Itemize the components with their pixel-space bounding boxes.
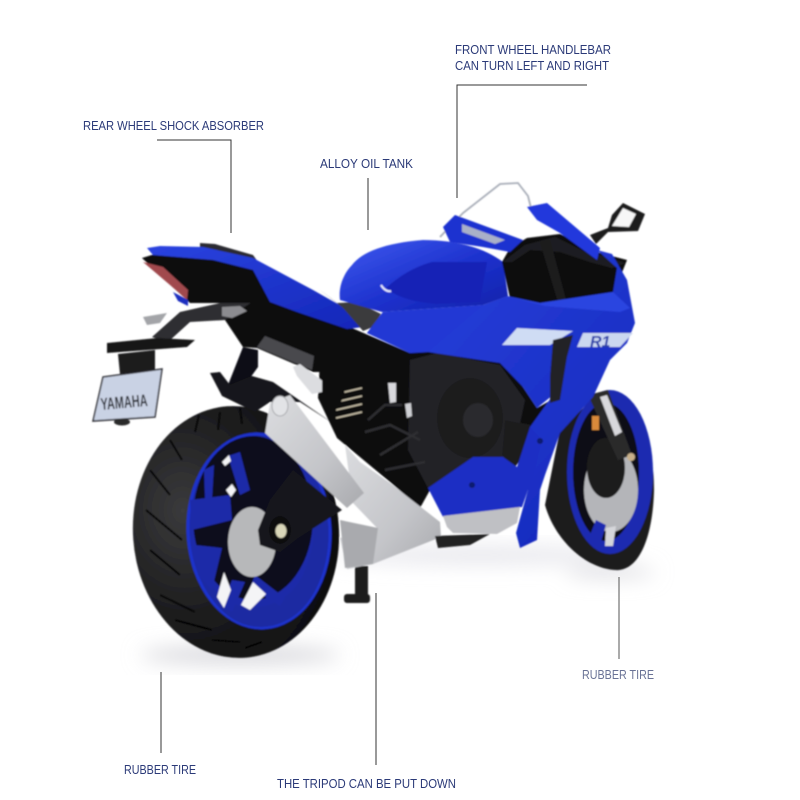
floor shadows (140, 547, 655, 663)
white stripe (502, 328, 573, 345)
blue side fairing: R1 (590, 334, 611, 351)
kickstand (344, 566, 370, 603)
shock absorber spring (336, 388, 362, 418)
brake disc (228, 507, 276, 577)
air vent (550, 335, 573, 403)
callout: rear wheel shock absorber (83, 119, 264, 233)
callout: front rubber tire (582, 577, 654, 682)
blue side fairing (367, 234, 635, 548)
silver brackets (388, 383, 396, 403)
belly panel (428, 427, 542, 517)
fork (588, 390, 632, 460)
callout: rear wheel shock absorber: REAR WHEEL SHOCK ABSORBER (83, 119, 264, 133)
fuel tank (340, 240, 508, 312)
dark lower link (435, 534, 490, 548)
callout: alloy oil tank (320, 157, 414, 230)
central black frame and engine (300, 318, 560, 508)
rear leg (228, 347, 258, 392)
turn signal and hanger (152, 302, 252, 342)
front wheel (545, 390, 654, 570)
callout: alloy oil tank: ALLOY OIL TANK (320, 157, 414, 171)
callout: rear rubber tire (124, 672, 196, 777)
callout: tripod: THE TRIPOD CAN BE PUT DOWN (277, 777, 456, 791)
wheel hugger (210, 372, 334, 424)
R1 badge (577, 333, 633, 347)
rim (183, 430, 335, 632)
spokes (190, 452, 285, 612)
main fairing body (367, 250, 635, 548)
plate text: YAMAHA (100, 391, 148, 414)
callout: front wheel handlebar (455, 43, 611, 198)
axle (269, 516, 291, 544)
license plate assembly (93, 338, 195, 426)
rear wheel (124, 399, 348, 665)
windscreen and winglets (440, 183, 600, 260)
tail and rear seat (142, 243, 381, 331)
swing arm (258, 470, 342, 552)
crescent of the rim (195, 510, 328, 627)
engine case (437, 378, 503, 458)
motorcycle illustration (93, 183, 654, 665)
rear subframe (143, 300, 347, 424)
exhaust (265, 395, 441, 569)
callout: front rubber tire: RUBBER TIRE (582, 668, 654, 682)
cockpit and handlebars (502, 234, 627, 304)
callout: rear rubber tire: RUBBER TIRE (124, 763, 196, 777)
mirror (590, 203, 645, 244)
silver belly guard (443, 507, 520, 534)
callout: front wheel handlebar: FRONT WHEEL HANDLEBAR (455, 43, 611, 57)
wheel gaps (217, 455, 266, 610)
callout: front wheel handlebar: CAN TURN LEFT AND RIGHT (455, 59, 609, 73)
tire (124, 399, 348, 665)
